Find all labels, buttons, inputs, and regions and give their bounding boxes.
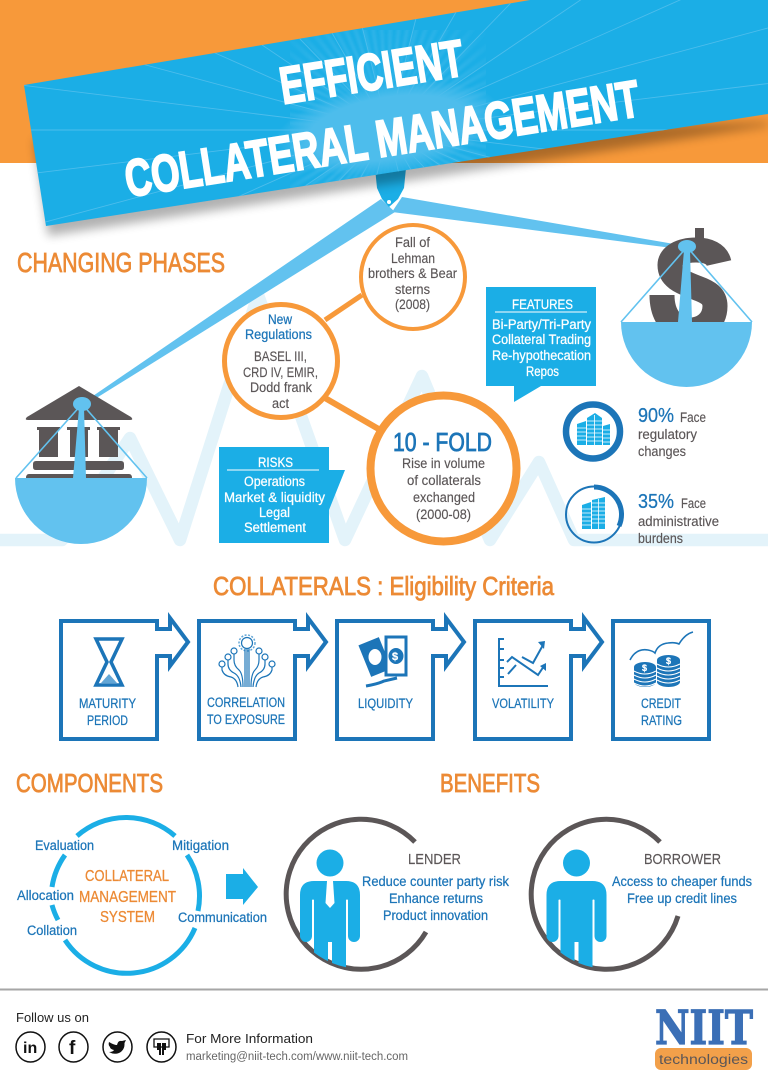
ring	[286, 819, 426, 969]
icon: dollar on scale pan	[621, 228, 752, 387]
circle: new regulations: act	[272, 396, 289, 411]
icon: ring with buildings	[566, 486, 622, 542]
circle: fall of lehman: Fall of	[395, 235, 430, 250]
scale beam	[90, 168, 680, 402]
orange header band	[0, 0, 768, 163]
icon: coins with trend: $	[642, 663, 647, 673]
circle: fall of lehman: sterns	[395, 282, 430, 297]
icon: person	[546, 850, 606, 975]
card: volatility	[475, 618, 602, 739]
stat: 90 percent: changes	[638, 444, 686, 459]
circle: ten fold: 10 - FOLD	[393, 427, 492, 457]
icon: banknotes: $	[392, 651, 398, 663]
right beam arm	[392, 197, 680, 249]
callout: risks: Market & liquidity	[224, 490, 325, 505]
icon: facebook: f	[69, 1038, 76, 1059]
icon: coins with trend: $	[666, 656, 671, 666]
card: maturity period: MATURITY	[79, 696, 136, 711]
callout: risks: Legal	[259, 505, 290, 520]
bank steps	[26, 461, 132, 478]
diagram: collateral management system: Evaluation	[35, 838, 94, 853]
panel: lender: Reduce counter party risk	[362, 874, 509, 889]
stat: 90 percent: regulatory	[638, 427, 697, 442]
background wave	[0, 295, 768, 540]
diagram: collateral management system	[17, 817, 267, 973]
circle: ten fold: of collaterals	[407, 473, 481, 488]
card: correlation to exposure: TO EXPOSURE	[207, 712, 285, 727]
diagram: collateral management system: Communication	[178, 910, 267, 925]
arrow: components to benefits	[226, 868, 258, 905]
circle: ten fold: exchanged	[413, 490, 475, 505]
callout: risks: Settlement	[244, 520, 306, 535]
title banner	[24, 0, 768, 226]
callout: features: Collateral Trading	[492, 332, 591, 347]
ring arcs	[52, 817, 200, 973]
footer: contact information: marketing@niit-tech.com/www.niit-tech.com	[186, 1051, 408, 1063]
stat: 90 percent	[566, 404, 706, 459]
callout: risks: RISKS	[258, 455, 293, 470]
card: liquidity: LIQUIDITY	[358, 696, 413, 711]
heading: components: COMPONENTS	[16, 768, 163, 798]
stat: 90 percent: Face	[680, 410, 706, 425]
bank columns	[37, 427, 120, 457]
stat: 90 percent: 90%	[638, 405, 674, 427]
stat: 35 percent: 35%	[638, 491, 674, 513]
icon: linkedin: in	[23, 1040, 37, 1057]
heading: eligibility criteria: COLLATERALS : Eligibility Criteria	[213, 571, 554, 601]
scale strings	[16, 404, 147, 478]
circle: new regulations: New	[268, 312, 292, 327]
circle: fall of lehman: brothers & Bear	[368, 266, 457, 281]
icon: line chart	[499, 638, 548, 686]
diagram: collateral management system: Collation	[27, 923, 77, 938]
icon: linkedin	[16, 1032, 45, 1062]
stat: 35 percent: Face	[681, 496, 706, 511]
circle: new regulations: BASEL III,	[254, 349, 307, 364]
diagram: collateral management system: SYSTEM	[100, 909, 155, 926]
footer: social links	[16, 1011, 176, 1062]
panel: borrower	[531, 819, 752, 975]
icon: bank on scale pan	[15, 386, 147, 544]
stat: 35 percent	[566, 486, 719, 546]
diagram: collateral management system: Mitigation	[172, 838, 229, 853]
panel: lender	[286, 819, 509, 975]
icon: facebook	[59, 1032, 88, 1062]
ring	[531, 819, 678, 969]
callout: risks	[219, 447, 345, 543]
callout: risks: Operations	[244, 474, 305, 489]
card: maturity period: PERIOD	[87, 713, 128, 728]
logo: niit technologies: technologies	[659, 1052, 748, 1067]
scale strings	[621, 247, 752, 322]
scale pan	[621, 322, 752, 387]
scale pan	[15, 478, 147, 544]
circle: fall of lehman	[361, 225, 465, 329]
panel: lender: Enhance returns	[389, 891, 483, 906]
timeline connectors	[325, 295, 362, 320]
footer divider	[0, 988, 768, 990]
card: volatility: VOLATILITY	[492, 696, 554, 711]
panel: borrower: BORROWER	[644, 851, 721, 868]
stat: 35 percent: administrative	[638, 514, 719, 529]
diagram: collateral management system: Allocation	[17, 888, 74, 903]
bank roof	[26, 386, 132, 420]
callout: features: Repos	[526, 364, 559, 379]
diagram: collateral management system: MANAGEMENT	[79, 889, 176, 906]
icon: person with tie	[300, 850, 360, 975]
pendant pivot	[375, 168, 406, 207]
callout: features	[486, 287, 596, 402]
title line 1: EFFICIENT	[276, 30, 468, 116]
icon: ring with buildings	[566, 404, 620, 458]
banner shadow	[34, 122, 768, 236]
icon: hourglass	[96, 639, 122, 685]
panel: lender: LENDER	[408, 851, 461, 868]
card: correlation to exposure	[199, 618, 326, 739]
icon: twitter	[103, 1032, 132, 1062]
icon: slideshare	[147, 1032, 176, 1062]
left beam arm	[90, 199, 395, 402]
callout: features: Bi-Party/Tri-Party	[492, 317, 591, 332]
circle: ten fold: (2000-08)	[416, 507, 471, 522]
card: credit rating	[613, 621, 709, 739]
footer: contact information: For More Information	[186, 1031, 313, 1046]
card: credit rating: RATING	[641, 713, 682, 728]
callout: features: Re-hypothecation	[492, 348, 591, 363]
circle: new regulations: Dodd frank	[250, 380, 312, 395]
diagram: collateral management system: COLLATERAL	[85, 868, 169, 885]
connector to ten fold circle	[325, 398, 382, 431]
circle: ten fold: Rise in volume	[402, 456, 485, 471]
panel: borrower: Free up credit lines	[627, 891, 737, 906]
stat: 35 percent: burdens	[638, 531, 683, 546]
card: correlation to exposure: CORRELATION	[207, 695, 285, 710]
circle: fall of lehman: Lehman	[391, 251, 435, 266]
dollar sign	[662, 228, 719, 330]
circle: fall of lehman: (2008)	[395, 297, 430, 312]
panel: lender: Product innovation	[383, 908, 488, 923]
heading: changing phases: CHANGING PHASES	[17, 247, 225, 278]
card: maturity period	[61, 618, 188, 739]
circle: new regulations	[224, 304, 338, 418]
heading: benefits: BENEFITS	[440, 768, 540, 798]
card: credit rating: CREDIT	[641, 696, 681, 711]
panel: borrower: Access to cheaper funds	[612, 874, 752, 889]
circle: new regulations: CRD IV, EMIR,	[243, 365, 318, 380]
circle: new regulations: Regulations	[245, 327, 312, 342]
footer: contact information	[186, 1031, 408, 1063]
card: liquidity	[337, 618, 464, 739]
circle: ten fold	[370, 396, 516, 542]
footer: social links: Follow us on	[16, 1011, 89, 1025]
icon: coins with trend	[630, 632, 693, 687]
icon: circuit tree	[219, 635, 275, 687]
callout: features: FEATURES	[512, 297, 573, 312]
